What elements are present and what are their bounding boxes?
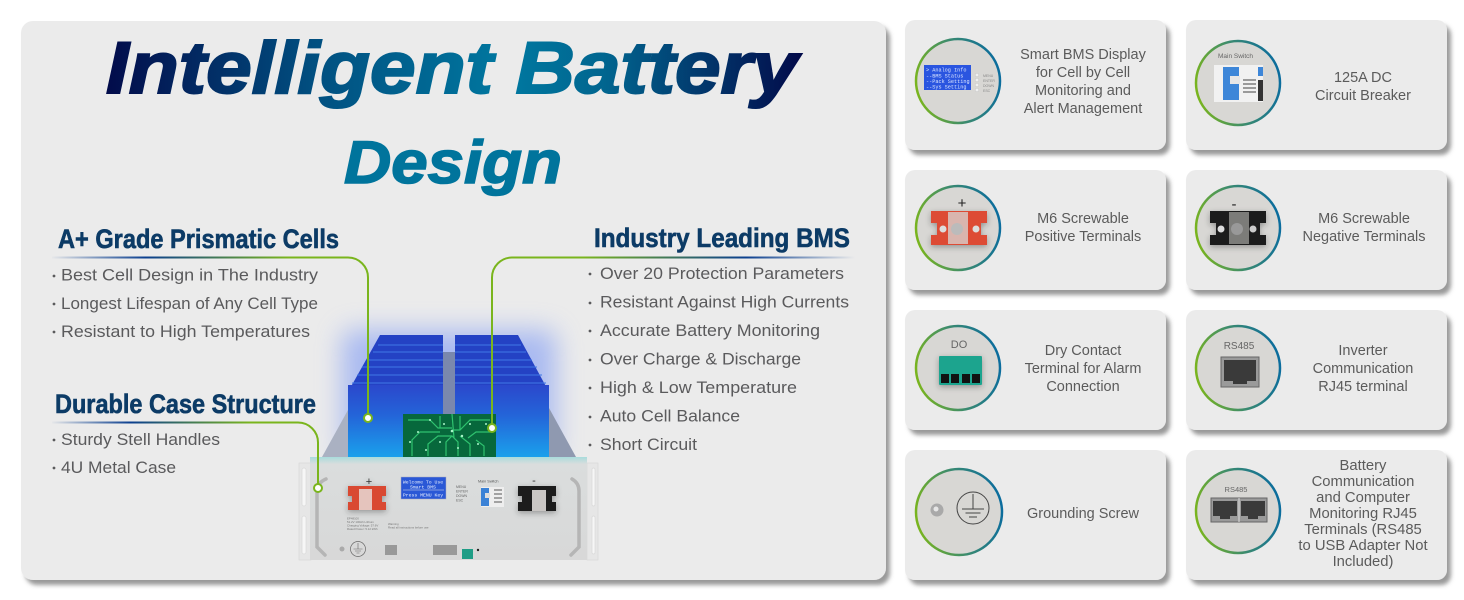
spec text on panel: Rated Power: 5.12 kWh (347, 527, 378, 531)
text: Positive Terminals (1025, 229, 1141, 245)
card: grounding screw (905, 450, 1166, 580)
icon: negative terminal (1196, 186, 1280, 270)
text: M6 Screwable (1037, 211, 1129, 227)
icon: BMS display: ESC (983, 89, 991, 93)
text: Monitoring RJ45 (1309, 506, 1417, 522)
spec text on panel: Read all instructions before use (388, 526, 429, 530)
battery illustration (299, 330, 598, 560)
card: positive terminal (905, 170, 1166, 290)
icon: breaker: Main Switch (1218, 53, 1253, 60)
BMS screen on panel: Welcome To Use (403, 480, 443, 486)
connector: prismatic cells (52, 258, 372, 422)
heading: Durable Case Structure: Durable Case Structure (55, 389, 316, 419)
text: Smart BMS Display (1020, 47, 1147, 63)
icon: RJ45 port: RS485 (1224, 341, 1255, 352)
list: BMS features (589, 264, 849, 454)
list: BMS features: Over Charge & Discharge (600, 350, 801, 368)
text: Grounding Screw (1027, 506, 1140, 522)
text: Communication (1312, 474, 1414, 490)
icon: BMS display: ENTER (983, 79, 995, 83)
text: Battery (1340, 458, 1387, 474)
icon: negative terminal: - (1232, 196, 1236, 213)
positive terminal on panel: + (366, 476, 372, 488)
spec text on panel: Charging Voltage: 57.6V (347, 524, 378, 528)
prismatic cells (348, 335, 549, 458)
text: Alert Management (1024, 101, 1142, 117)
card: Smart BMS display (905, 20, 1166, 150)
text: Connection (1046, 379, 1120, 395)
list: case features: 4U Metal Case (61, 458, 176, 477)
icon: breaker (1196, 41, 1280, 125)
BMS screen on panel: ESC (456, 498, 464, 502)
blue glow (342, 330, 556, 460)
list: BMS features: Accurate Battery Monitoring (600, 321, 820, 340)
spec text on panel: Warning (388, 522, 399, 526)
circuit board (403, 414, 496, 458)
icon: RJ45 port (1196, 326, 1280, 410)
BMS screen on panel (401, 477, 468, 502)
icon: dual RJ45 ports (1196, 469, 1280, 553)
list: cell features: Longest Lifespan of Any Cell Type (61, 294, 318, 313)
text: Communication (1313, 361, 1413, 377)
list: cell features: Best Cell Design in The Industry (61, 266, 319, 284)
handles (317, 479, 579, 555)
bottom ports on panel (340, 542, 479, 559)
card: inverter communication (1186, 310, 1447, 430)
spec text on panel (347, 516, 429, 531)
text: Monitoring and (1035, 83, 1131, 99)
list: cell features (53, 266, 319, 341)
BMS screen on panel: Press MENU Key (403, 492, 443, 498)
text: Circuit Breaker (1315, 88, 1411, 104)
text: RJ45 terminal (1318, 379, 1408, 395)
icon: BMS display: --Pack Setting (926, 79, 970, 85)
front panel ears (299, 463, 598, 560)
icon: positive terminal: + (958, 195, 967, 212)
list: cell features: Resistant to High Temperatures (61, 322, 310, 341)
text: 125A DC (1334, 70, 1392, 86)
positive terminal on panel (348, 476, 386, 510)
list: BMS features: High & Low Temperature (600, 378, 797, 397)
icon: dual RJ45 ports: RS485 (1225, 485, 1247, 494)
card: battery communication (1186, 450, 1447, 580)
list: BMS features: Over 20 Protection Parameters (600, 264, 844, 283)
heading: A+ Grade Prismatic Cells: A+ Grade Prismatic Cells (58, 224, 339, 254)
heading: Industry Leading BMS: Industry Leading BMS (594, 223, 850, 253)
panel: intelligent battery design (21, 21, 886, 580)
BMS screen on panel: Smart BMS (410, 484, 436, 490)
text: Included) (1333, 554, 1394, 570)
BMS screen on panel: MENU (456, 485, 467, 489)
title: Intelligent Battery (106, 28, 802, 109)
text: Dry Contact (1045, 343, 1121, 359)
card: negative terminal (1186, 170, 1447, 290)
text: for Cell by Cell (1036, 65, 1130, 81)
breaker on panel: Main Switch (478, 480, 498, 484)
icon: BMS display: MENU (983, 74, 994, 78)
icon: green terminal block (916, 326, 1000, 410)
text: Inverter (1338, 343, 1388, 359)
title: Design (344, 129, 562, 196)
BMS screen on panel: ENTER (456, 490, 468, 494)
connector: case (52, 422, 322, 492)
list: BMS features: Short Circuit (600, 435, 697, 454)
front panel (310, 457, 587, 560)
icon: BMS display: > Analog Info (926, 68, 966, 74)
text: Terminals (RS485 (1304, 522, 1422, 538)
icon: BMS display (916, 39, 1000, 123)
list: BMS features: Resistant Against High Currents (600, 292, 849, 312)
card: dry contact (905, 310, 1166, 430)
connector: BMS (488, 258, 855, 432)
icon: BMS display: DOWN (983, 84, 995, 88)
breaker on panel (478, 480, 504, 507)
negative terminal on panel: - (532, 475, 536, 487)
spec text on panel: 51.2V 100Ah Lithium (347, 520, 374, 524)
text: to USB Adapter Not (1298, 538, 1428, 554)
text: Negative Terminals (1302, 229, 1426, 245)
list: case features: Sturdy Stell Handles (61, 430, 220, 449)
list: BMS features: Auto Cell Balance (600, 406, 740, 426)
icon: ground symbol (916, 469, 1002, 555)
list: case features (53, 430, 220, 477)
icon: BMS display: --Sys Setting (926, 84, 966, 90)
negative terminal on panel (518, 475, 556, 511)
text: Terminal for Alarm (1025, 361, 1141, 377)
title (106, 28, 802, 196)
icon: BMS display: --BMS Status (926, 74, 963, 80)
case rails (322, 352, 576, 458)
icon: positive terminal (916, 186, 1000, 270)
icon: green terminal block: DO (951, 339, 968, 351)
text: M6 Screwable (1318, 211, 1410, 227)
BMS screen on panel: DOWN (456, 494, 468, 498)
text: and Computer (1316, 490, 1410, 506)
spec text on panel: EP48100 (347, 516, 359, 520)
card: circuit breaker (1186, 20, 1447, 150)
